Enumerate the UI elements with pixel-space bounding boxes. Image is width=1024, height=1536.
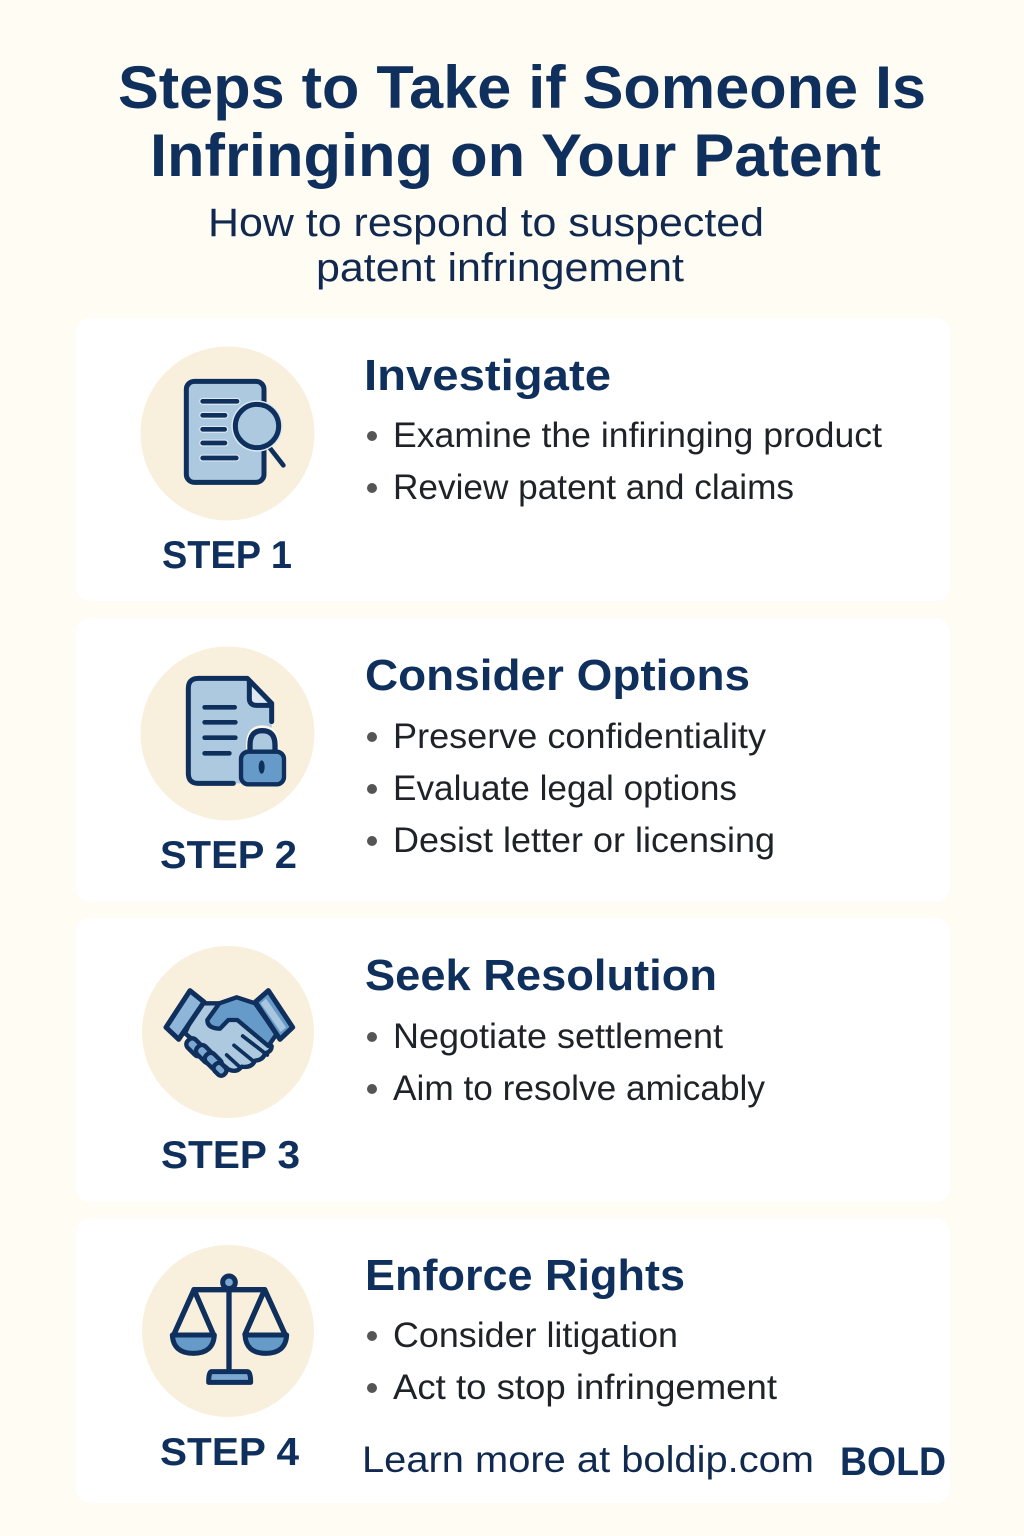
icon: scales of justice (142, 1245, 314, 1417)
subtitle (208, 201, 764, 290)
bullet list (367, 1017, 765, 1108)
bullet list: Desist letter or licensing (393, 821, 775, 860)
bullet list: Consider litigation (393, 1316, 678, 1355)
panel: step 3 seek resolution (76, 918, 950, 1202)
heading: Investigate (364, 351, 611, 400)
heading: Enforce Rights (365, 1251, 685, 1300)
bullet list: Aim to resolve amicably (393, 1069, 765, 1108)
bullet list (367, 1316, 777, 1407)
brand mark: BOLD (840, 1440, 946, 1484)
bullet list: Review patent and claims (393, 468, 794, 507)
icon: handshake (142, 946, 314, 1118)
step label: STEP 3 (161, 1134, 300, 1177)
title: Infringing on Your Patent (150, 122, 881, 189)
bullet list: Preserve confidentiality (393, 717, 767, 756)
icon: document with magnifying glass (140, 346, 314, 520)
bullet list (367, 717, 775, 860)
title: Steps to Take if Someone Is (118, 54, 926, 121)
icon: document with padlock (140, 646, 314, 820)
title (118, 54, 926, 189)
panel: step 2 consider options (76, 618, 950, 902)
step label: STEP 4 (160, 1431, 299, 1474)
bullet list: Act to stop infringement (393, 1368, 777, 1407)
bullet list (367, 416, 882, 507)
heading: Consider Options (365, 651, 750, 700)
panel: step 1 investigate (76, 318, 950, 601)
heading: Seek Resolution (365, 951, 717, 1000)
step label: STEP 2 (160, 834, 297, 877)
subtitle: How to respond to suspected (208, 201, 764, 245)
step label: STEP 1 (162, 534, 292, 577)
bullet list: Evaluate legal options (393, 769, 737, 808)
bullet list: Examine the infiringing product (393, 416, 882, 455)
subtitle: patent infringement (316, 246, 684, 290)
footer link text: Learn more at boldip.com (362, 1439, 814, 1480)
bullet list: Negotiate settlement (393, 1017, 723, 1056)
panel: step 4 enforce rights (76, 1218, 950, 1503)
